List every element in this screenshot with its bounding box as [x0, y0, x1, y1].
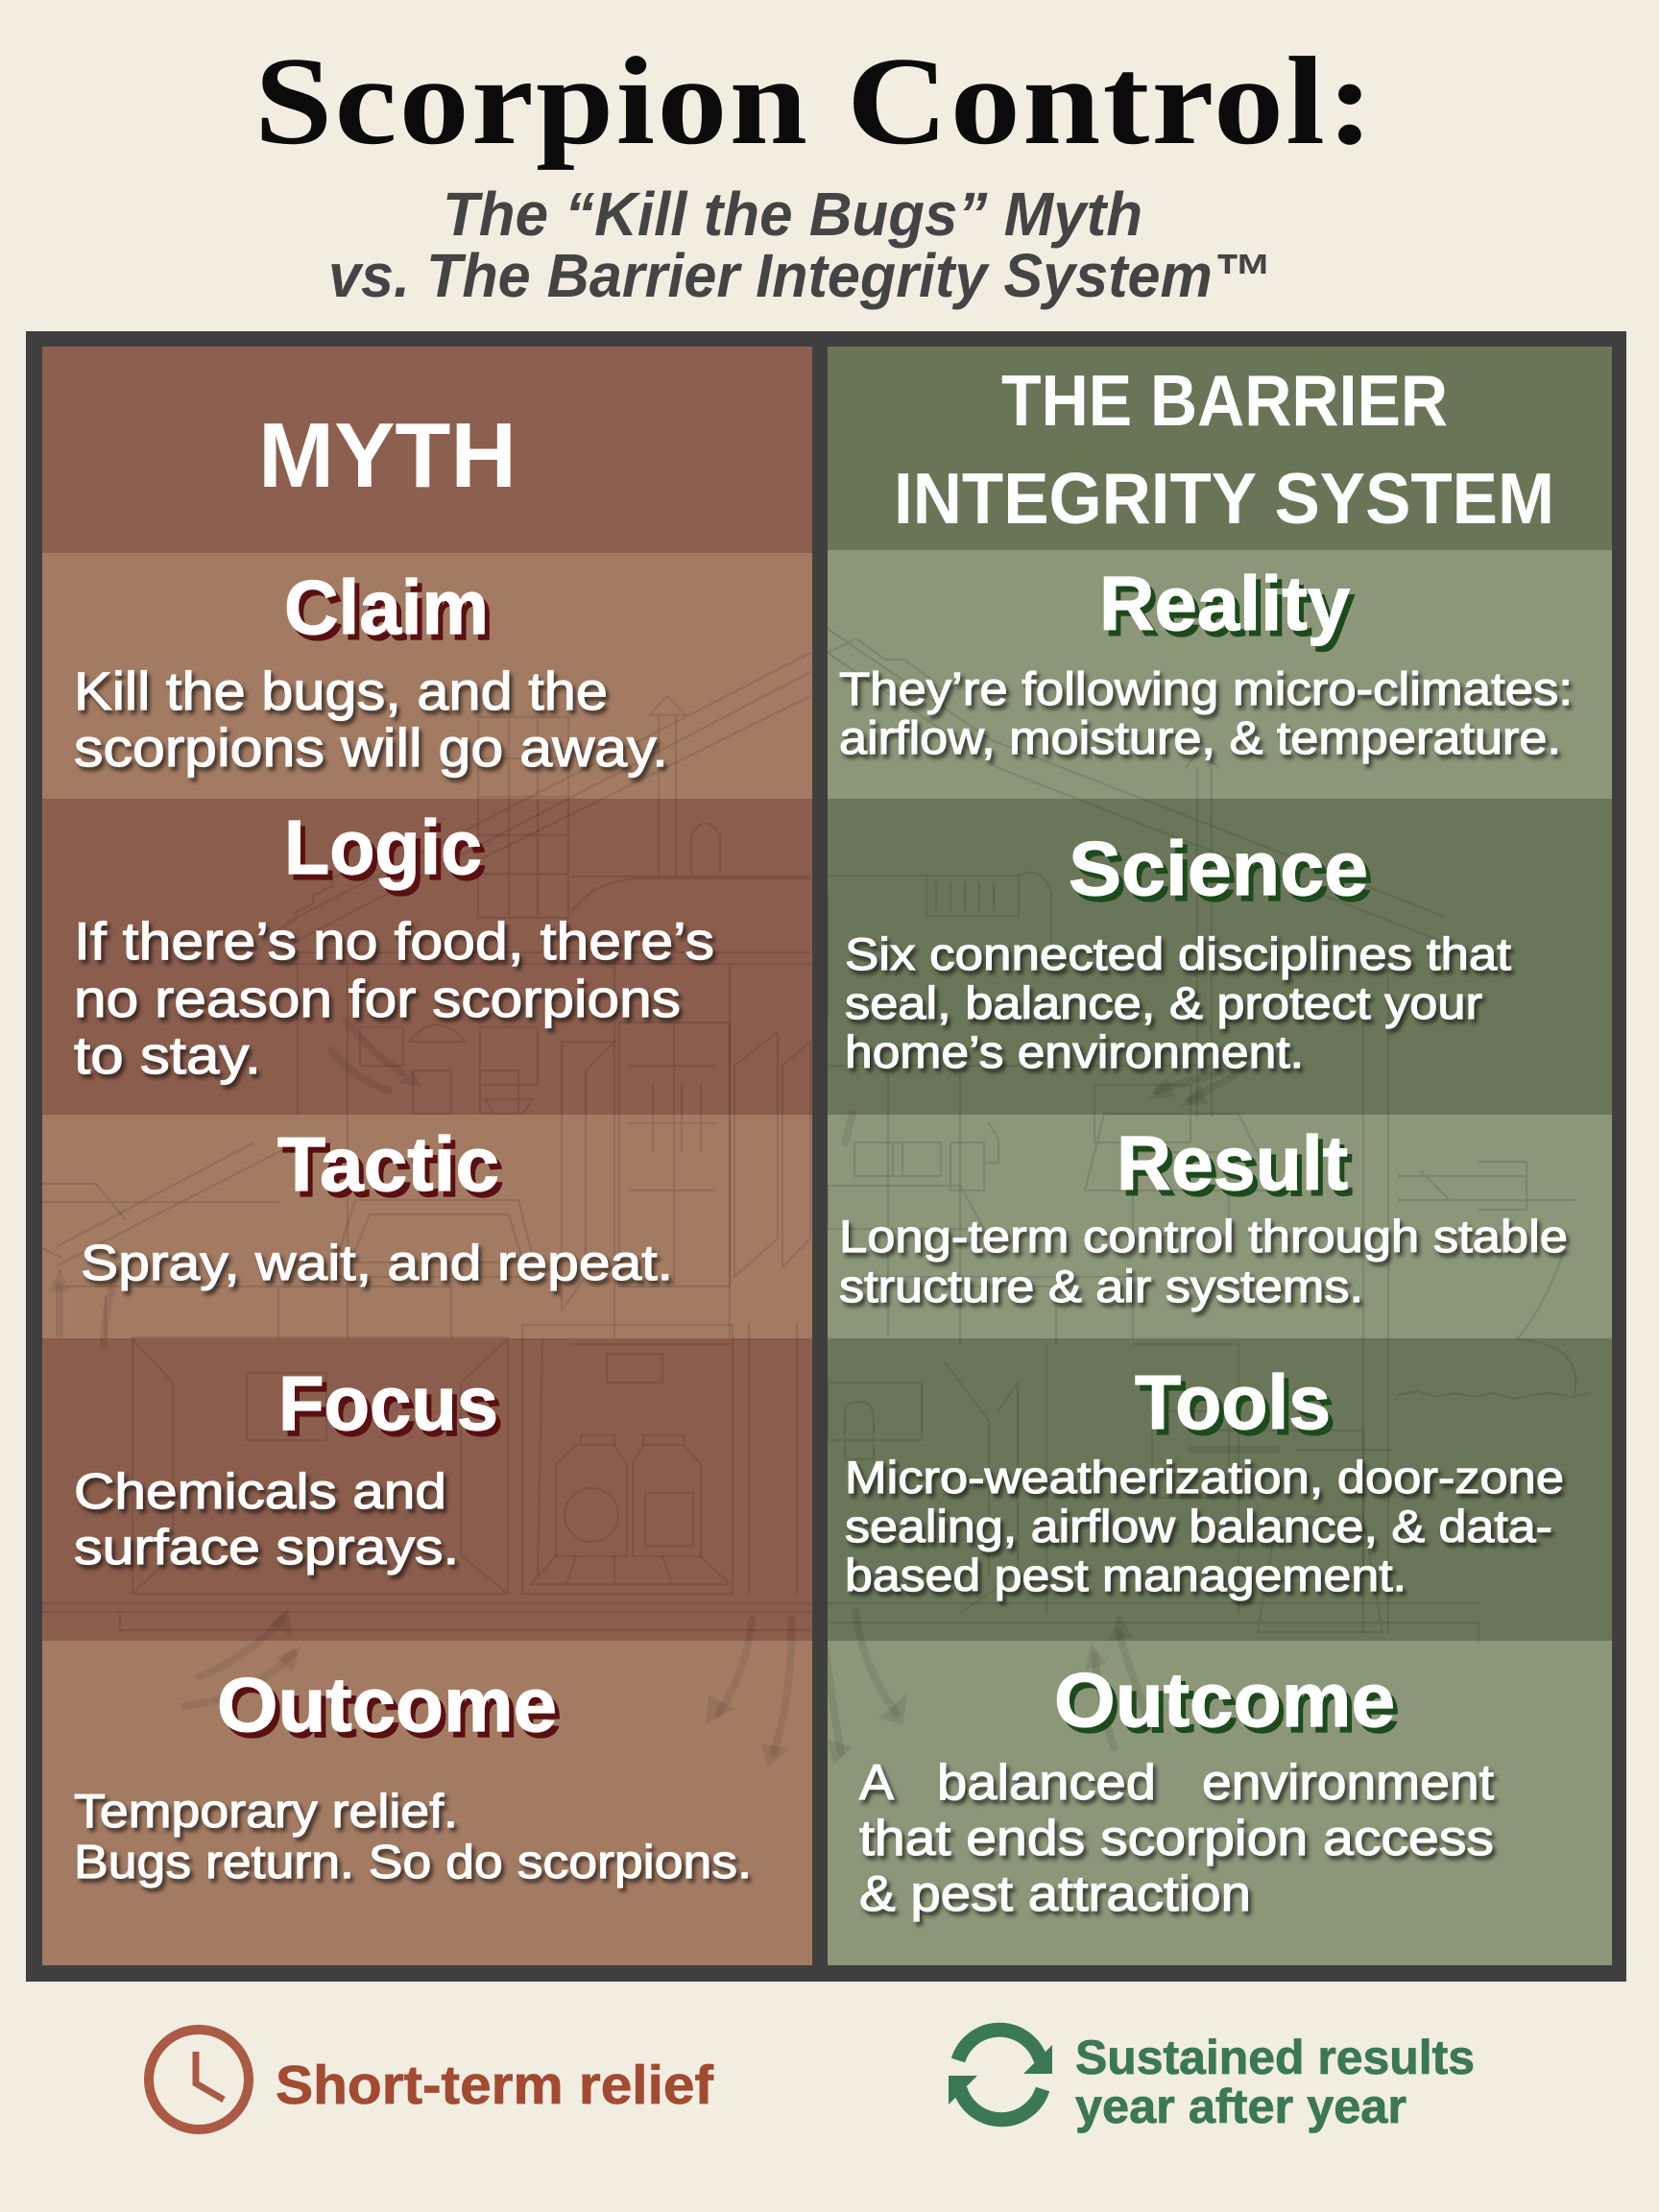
row: focus: surface sprays. [74, 1520, 459, 1575]
row: reality: Reality [1099, 561, 1351, 646]
footer: short-term relief [149, 2030, 714, 2129]
row: tools: based pest management. [845, 1550, 1407, 1600]
heading: the barrier integrity system [894, 360, 1554, 539]
subtitle [328, 180, 1271, 310]
panel: barrier integrity column text [839, 360, 1573, 1922]
row: outcome: & pest attraction [859, 1866, 1251, 1922]
row: outcome: that ends scorpion access [859, 1811, 1494, 1866]
row: logic: Logic [284, 805, 482, 890]
row: result: structure & air systems. [839, 1261, 1363, 1311]
row: outcome: A [859, 1755, 894, 1811]
row: outcome: Outcome [1054, 1657, 1395, 1743]
subtitle: vs. The Barrier Integrity System™ [328, 241, 1271, 310]
row: tools: sealing, airflow balance, & data- [845, 1501, 1552, 1551]
row: tools: Tools [1135, 1359, 1331, 1445]
row: result: Result [1117, 1120, 1348, 1206]
row: reality [839, 561, 1573, 764]
row: focus [74, 1360, 498, 1575]
row: claim: Claim [284, 565, 489, 650]
row: science: Science [1069, 826, 1368, 911]
house cross-section line art watermark [42, 629, 1590, 1767]
heading: the barrier integrity system: INTEGRITY SYSTEM [894, 458, 1554, 539]
panel: barrier integrity column backgrounds [828, 347, 1612, 1965]
icon: recycle arrows [949, 2030, 1052, 2120]
row: result: Long-term control through stable [839, 1211, 1568, 1262]
row: focus: Chemicals and [74, 1464, 446, 1520]
row: claim: Kill the bugs, and the [74, 661, 608, 721]
heading: the barrier integrity system: THE BARRIER [1001, 360, 1448, 441]
row: outcome: Outcome [217, 1662, 557, 1747]
row: science: Six connected disciplines that [845, 928, 1511, 979]
footer: sustained results: Sustained results [1075, 2031, 1475, 2084]
row: outcome: balanced [937, 1755, 1156, 1811]
row: outcome [74, 1662, 752, 1888]
panel: myth column backgrounds [42, 347, 812, 1965]
comparison frame [26, 331, 1626, 1982]
footer: sustained results: year after year [1075, 2080, 1407, 2133]
row: tactic: Tactic [277, 1121, 499, 1207]
row: science: home’s environment. [845, 1026, 1304, 1077]
row: logic: to stay. [74, 1025, 261, 1085]
row: logic: no reason for scorpions [74, 969, 681, 1028]
row: tools: Micro-weatherization, door-zone [845, 1452, 1564, 1503]
subtitle: The “Kill the Bugs” Myth [443, 180, 1142, 249]
row: tactic: Spray, wait, and repeat. [81, 1236, 673, 1291]
row: outcome: Bugs return. So do scorpions. [74, 1837, 752, 1888]
title: Scorpion Control: [254, 32, 1376, 171]
heading: MYTH: MYTH [258, 404, 517, 507]
row: focus: Focus [278, 1360, 498, 1446]
icon: clock [149, 2030, 249, 2129]
row: tactic [81, 1121, 673, 1291]
row: claim: scorpions will go away. [74, 717, 668, 778]
row: science [845, 826, 1511, 1077]
row: science: seal, balance, & protect your [845, 977, 1482, 1028]
row: logic [74, 805, 714, 1085]
row: logic: If there’s no food, there’s [74, 911, 714, 971]
row: tools [845, 1359, 1564, 1600]
footer: sustained results [949, 2030, 1475, 2133]
row: outcome [859, 1657, 1495, 1922]
row: result [839, 1120, 1568, 1311]
row: outcome: Temporary relief. [74, 1786, 458, 1838]
panel: myth column text [74, 404, 752, 1888]
footer: short-term relief: Short-term relief [276, 2055, 714, 2116]
row: claim [74, 565, 668, 778]
row: reality: airflow, moisture, & temperature. [839, 713, 1561, 764]
row: reality: They’re following micro-climates: [839, 664, 1573, 715]
row: outcome: environment [1202, 1755, 1495, 1811]
